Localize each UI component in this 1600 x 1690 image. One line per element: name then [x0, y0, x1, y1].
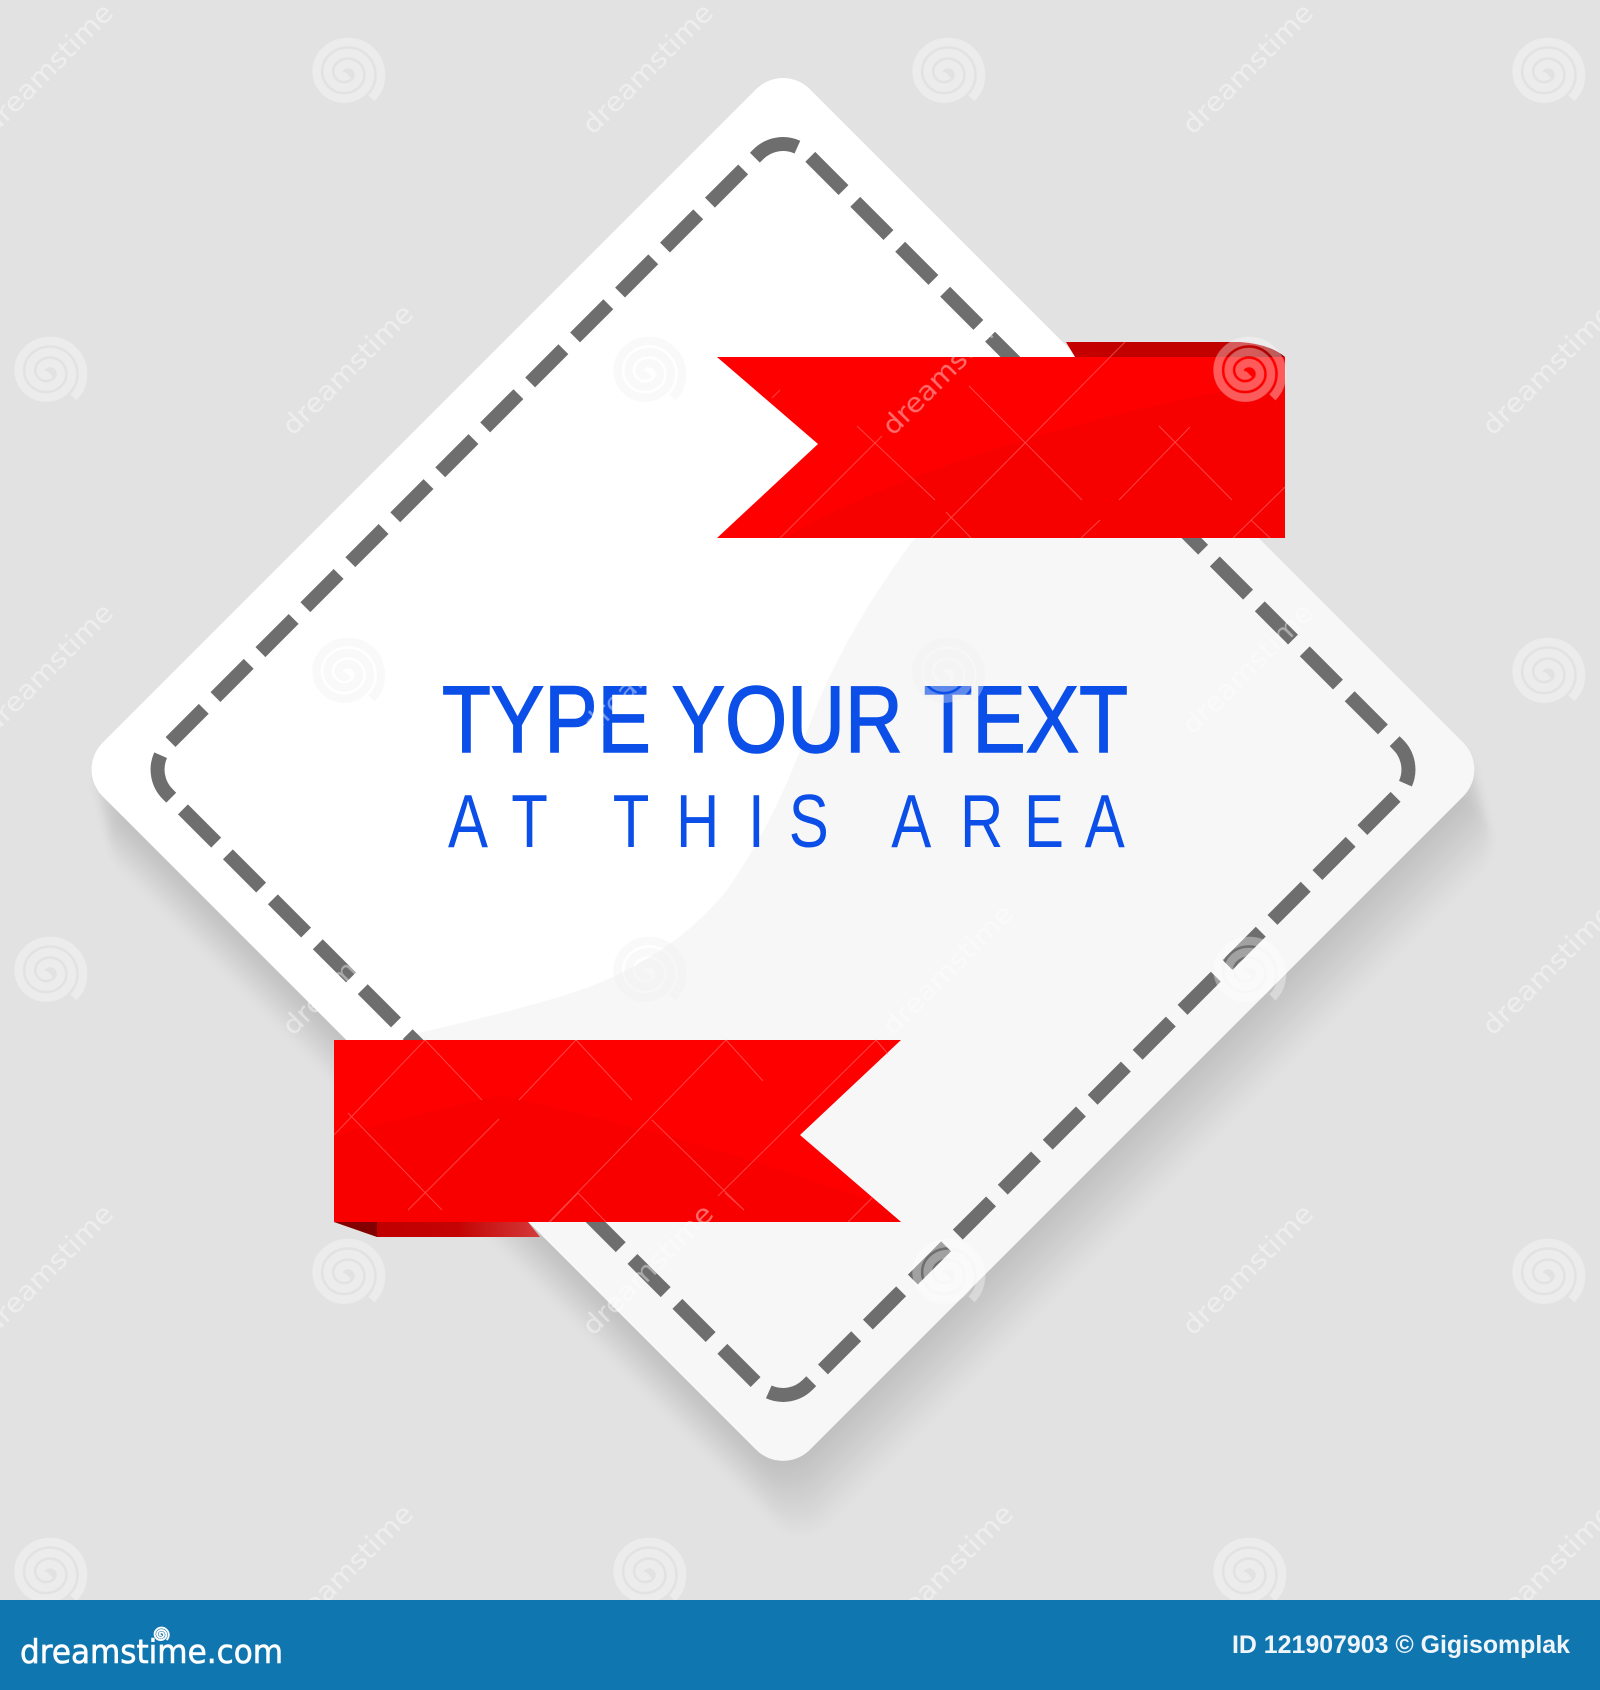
watermark wordmarks: dreamstime: [1176, 597, 1320, 741]
heading: TYPE YOUR TEXT: TYPE YOUR TEXT: [442, 667, 1128, 773]
bottom ribbon fold corner: [334, 1222, 377, 1237]
top ribbon shading: [784, 380, 1285, 538]
watermark wordmarks: dreamstime: [876, 298, 1020, 442]
footer bar: [0, 1600, 1600, 1690]
bottom ribbon shading: [334, 1095, 901, 1222]
top ribbon watermark lines: [772, 342, 1285, 538]
watermark wordmarks: dreamstime: [876, 1498, 1020, 1642]
footer logo text: dreamstime.com: [20, 1632, 283, 1671]
card base: [76, 62, 1490, 1477]
watermark wordmarks: dreamstime: [876, 898, 1020, 1042]
image id and credit: ID 121907903 © Gigisomplak: [1232, 1631, 1570, 1659]
panel: diamond card: [92, 78, 1474, 1461]
watermark wordmarks: dreamstime: [1176, 0, 1320, 141]
card gloss highlight: [92, 78, 1071, 1040]
top ribbon fold: [1066, 342, 1285, 357]
watermark wordmarks: dreamstime: [576, 597, 720, 741]
dashed stitch border: [143, 130, 1423, 1409]
subheading: AT THIS AREA: AT THIS AREA: [448, 781, 1125, 864]
watermark wordmarks: dreamstime: [276, 898, 420, 1042]
bottom ribbon fold: [377, 1222, 540, 1237]
bottom ribbon face: [334, 1040, 901, 1222]
top ribbon face: [717, 357, 1285, 538]
bottom ribbon watermark lines: [334, 1040, 888, 1222]
watermark wordmarks: dreamstime: [576, 1198, 720, 1342]
watermark wordmarks: dreamstime: [576, 0, 720, 141]
watermark wordmarks: dreamstime: [276, 298, 420, 442]
bottom ribbon: [334, 1040, 901, 1237]
card drop shadow: [77, 69, 1508, 1549]
watermark wordmarks: dreamstime: [1176, 1198, 1320, 1342]
watermark wordmarks: dreamstime: [276, 1498, 420, 1642]
footer logo spiral: [152, 1625, 172, 1644]
watermark spirals on white area: [305, 327, 995, 1017]
top ribbon: [717, 342, 1285, 538]
